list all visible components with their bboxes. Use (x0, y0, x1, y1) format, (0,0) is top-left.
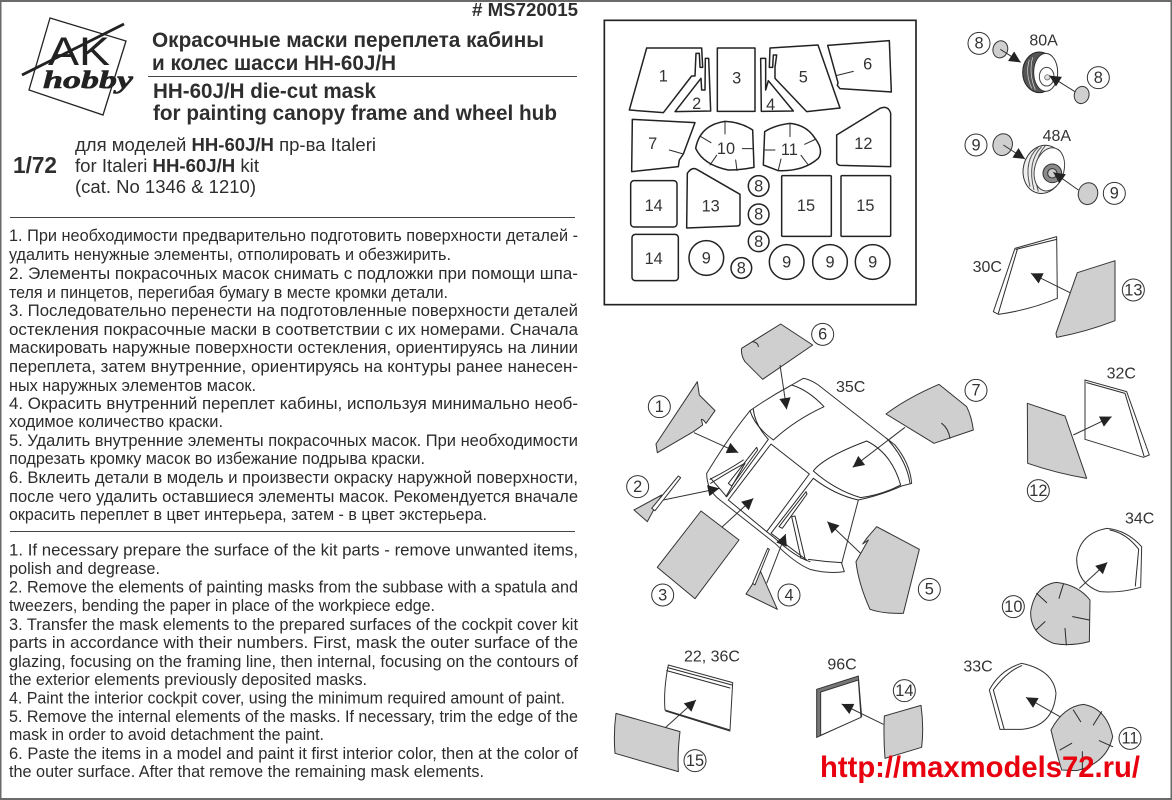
right column parts 32C, 34C, 33C (963, 365, 1154, 771)
mask 7 (632, 119, 695, 172)
wheels and 30C diagram (965, 32, 1144, 337)
mask 7: 7 (648, 135, 657, 153)
wheel 48A: 48A (1043, 128, 1071, 145)
logo: AK hobby: hobby (43, 67, 134, 94)
title: english: for painting canopy frame and wheel hub (153, 101, 557, 125)
masks 8: 8 (754, 206, 763, 224)
number callouts (965, 32, 1144, 301)
number callouts: 8 (974, 35, 984, 53)
number callouts: 2 (633, 478, 642, 496)
masks 9: 9 (825, 253, 835, 271)
instructions: russian: 4. Окрасить внутренний переплет кабины, используя минимально необ- (9, 395, 578, 413)
arrows (1026, 417, 1112, 717)
instructions: english: 4. Paint the interior cockpit cover, using the minimum required amount of paint. (9, 690, 565, 708)
number callouts: 13 (1124, 281, 1142, 299)
mask 3: 3 (732, 69, 741, 87)
mask 15 right: 15 (856, 197, 874, 215)
number callouts: 7 (971, 382, 981, 400)
part 22, 36C: 22, 36C (684, 649, 740, 666)
kit reference (75, 134, 376, 197)
mask 2 (634, 476, 681, 522)
instructions: russian: удалить ненужные элементы, отполировать и обезжирить. (9, 246, 451, 264)
instructions: english: the outer surface. After that remove the remaining mask elements. (9, 763, 484, 781)
instructions: russian: 5. Удалить внутренние элементы покрасочных масок. При необходимости (9, 432, 578, 450)
arrows (663, 365, 905, 583)
mask 12: 12 (854, 135, 872, 153)
mask 14 (884, 705, 923, 758)
number callouts: 9 (971, 136, 981, 154)
bottom parts 22/36C and 96C (614, 649, 923, 772)
number callouts: 15 (686, 752, 704, 770)
masks 8: 8 (754, 177, 763, 195)
instructions: english: the exterior elements previously deposited masks. (9, 671, 367, 689)
number callouts: 14 (895, 682, 913, 700)
mask 4: 4 (766, 96, 775, 114)
mask 14 top (631, 181, 677, 227)
masks 9: 9 (782, 253, 791, 271)
number callouts: 5 (925, 581, 934, 599)
mask 4 (761, 58, 793, 114)
number callouts: 10 (1004, 598, 1022, 616)
mask 3 (657, 511, 739, 599)
instructions: english: 5. Remove the internal elements of the masks. If necessary, trim the edge of the (9, 708, 578, 726)
mask 10 (1031, 582, 1090, 645)
instructions: english: 3. Transfer the mask elements to the prepared surfaces of the cockpit cover kit (9, 616, 578, 634)
mask 13 (1056, 261, 1115, 337)
instructions: russian: 3. Последовательно перенести на подготовленные поверхности деталей (9, 302, 578, 320)
instructions: english: parts in accordance with their numbers. First, mask the outer surface of the (9, 634, 578, 652)
part 35C canopy (707, 378, 912, 572)
instructions: english: mask in order to avoid detachment the paint. (9, 726, 324, 744)
title: russian: Окрасочные маски переплета кабины (152, 28, 544, 52)
kit reference: for Italeri HH-60J/H kit (75, 155, 259, 176)
title: russian: и колес шасси HH-60J/H (152, 51, 396, 75)
part 96C: 96C (827, 656, 857, 673)
part 34C: 34C (1125, 510, 1154, 527)
mask 10 (696, 121, 754, 171)
instructions: english: 2. Remove the elements of painting masks from the subbase with a spatula and (9, 578, 578, 596)
masks 9 (689, 241, 890, 279)
part 30C (993, 237, 1057, 314)
number callouts: 11 (1122, 730, 1138, 748)
part label 30C: 30C (973, 259, 1002, 276)
mask 2 (675, 58, 711, 113)
mask 13 (687, 169, 740, 228)
scale: 1/72 (13, 152, 57, 178)
instructions: russian: окрасить переплет в цвет интерьера, затем - в цвет экстерьера. (9, 506, 487, 524)
part 33C: 33C (963, 659, 993, 676)
number callouts: 12 (1029, 482, 1047, 500)
instructions: english (9, 542, 579, 781)
arrows (666, 700, 883, 727)
masks 8: 8 (737, 259, 746, 277)
instructions: russian: 6. Вклеить детали в модель и произвести окраску наружной поверхности, (9, 469, 578, 487)
mask 14 bottom: 14 (645, 250, 663, 268)
mask 6 (828, 41, 891, 92)
masks 9: 9 (868, 253, 877, 271)
mask 1: 1 (659, 68, 668, 86)
title: english (153, 79, 557, 125)
kit reference: (cat. No 1346 & 1210) (75, 176, 256, 197)
mask 14 bottom (632, 234, 678, 281)
instructions: russian: ходимое количество краски. (9, 413, 223, 431)
mask 6 (741, 324, 813, 379)
mask 1 (629, 48, 703, 113)
masks 8 (991, 39, 1091, 105)
instructions: russian: 2. Элементы покрасочных масок снимать с подложки при помощи шпа- (9, 265, 578, 283)
instructions: english: tweezers, bending the paper in place of the workpiece edge. (9, 597, 435, 615)
mask 15 left: 15 (797, 197, 815, 215)
mask 7 (886, 384, 973, 443)
masks 8: 8 (754, 233, 763, 251)
mask 2: 2 (692, 95, 701, 113)
part 32C: 32C (1107, 365, 1136, 382)
instructions: russian: 1. При необходимости предварительно подготовить поверхности деталей - (9, 227, 578, 245)
instructions: russian: после чего удалить оставшиеся элементы масок. Рекомендуется вначале (9, 488, 578, 506)
mask 12 (1027, 403, 1087, 478)
mask 5 (856, 527, 919, 613)
arrows (1000, 49, 1078, 293)
mask 5: 5 (799, 68, 808, 86)
wheel 48A (1018, 128, 1071, 198)
masks 9 (990, 132, 1100, 207)
instructions: russian (9, 227, 578, 524)
instructions: russian: остекления покрасочные маски в соответствии с их номерами. Сначала (9, 321, 578, 339)
mask 11: 11 (781, 141, 798, 159)
mask 5 (769, 45, 840, 112)
mask sheet panel (604, 20, 916, 305)
number callouts (1002, 480, 1141, 749)
number callouts: 8 (1094, 69, 1103, 87)
kit reference: для моделей HH-60J/H пр-ва Italeri (75, 134, 376, 155)
mask 14 top: 14 (645, 197, 663, 215)
mask 11 (1051, 704, 1113, 771)
wheel 80A: 80A (1029, 32, 1058, 49)
part label 35C: 35C (836, 379, 865, 396)
wheel 80A (1023, 32, 1058, 93)
part 32C (1085, 365, 1149, 457)
instructions: russian: теля и пинцетов, перегибая бумагу в месте кромки детали. (9, 284, 448, 302)
instructions: russian: подрезать кромку масок во избежание подрыва краски. (9, 450, 425, 468)
mask 15 right (841, 176, 891, 236)
mask 4 (746, 548, 777, 609)
part 96C (817, 656, 862, 737)
instructions: russian: ных наружных элементов масок. (9, 377, 256, 395)
logo: AK hobby (22, 18, 134, 115)
masks 9: 9 (702, 249, 711, 267)
mask 12 (837, 107, 891, 167)
number callouts (627, 323, 987, 606)
mask 1 (656, 382, 715, 453)
instructions: english: 1. If necessary prepare the surface of the kit parts - remove unwanted items, (9, 542, 578, 560)
number callouts: 3 (658, 586, 667, 604)
logo: AK hobby: AK (48, 30, 110, 74)
website url: http://maxmodels72.ru/ (820, 751, 1141, 784)
part 34C (1077, 510, 1154, 592)
mask 11 (763, 123, 821, 171)
title: english: HH-60J/H die-cut mask (153, 79, 376, 103)
mask 3 (717, 48, 755, 111)
masks 8 (731, 176, 769, 278)
number callouts: 1 (655, 398, 664, 416)
instructions: english: polish and degrease. (9, 560, 160, 578)
number callouts: 4 (784, 586, 794, 604)
number callouts (684, 680, 915, 772)
part 33C (963, 659, 1056, 729)
mask 10: 10 (717, 140, 735, 158)
number callouts: 6 (818, 326, 827, 344)
instructions: english: glazing, focusing on the framing line, then internal, focusing on the contours of (9, 653, 579, 671)
title: russian (152, 28, 544, 75)
instructions: english: 6. Paste the items in a model and paint it first interior color, then at the color of (9, 745, 579, 763)
part 22, 36C (665, 649, 740, 731)
mask 15 left (782, 176, 831, 236)
instructions: russian: маскировать наружные поверхности остекления, ориентируясь на линии (9, 339, 578, 357)
mask 15 (614, 713, 680, 772)
instructions: russian: переплета, затем внутренние, ориентируясь на контуры ранее нанесен- (9, 358, 578, 376)
canopy assembly diagram (627, 323, 987, 613)
mask 13: 13 (702, 197, 720, 215)
mask 6: 6 (863, 55, 872, 73)
number callouts: 9 (1110, 185, 1119, 203)
